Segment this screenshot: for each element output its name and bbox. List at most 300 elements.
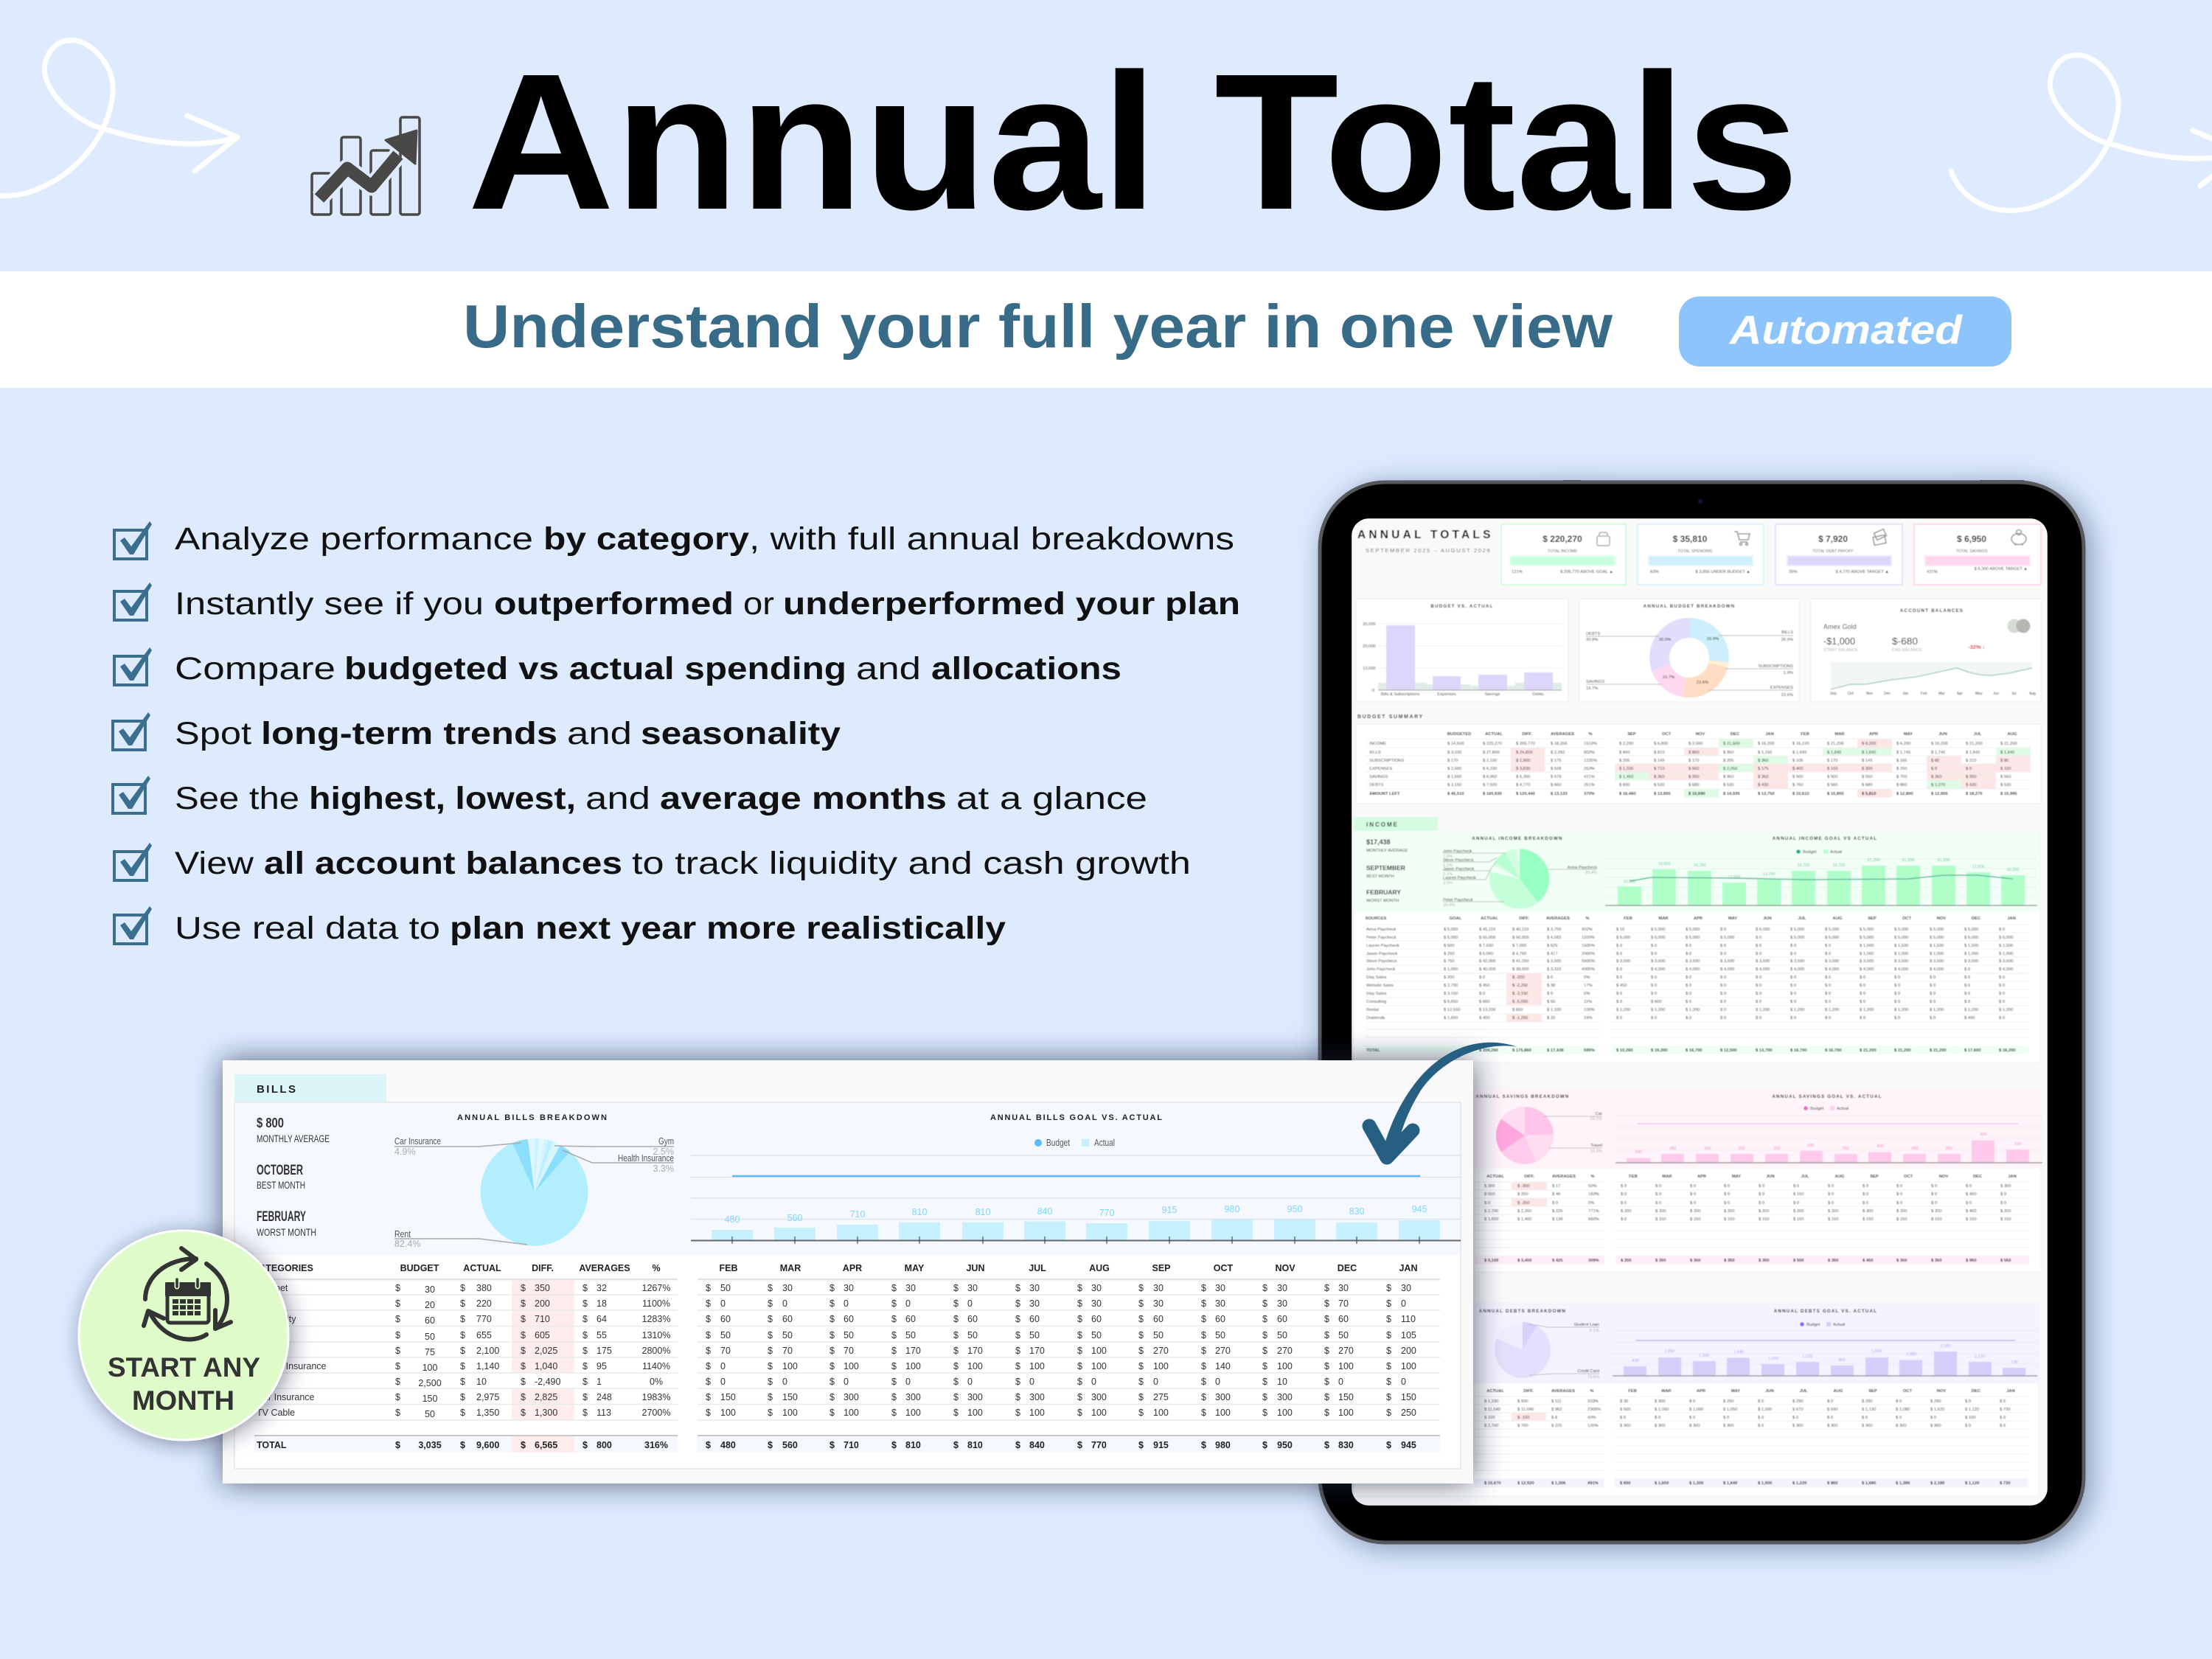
income table: MAY bbox=[1728, 917, 1737, 921]
table rows: 1 bbox=[597, 1377, 602, 1387]
debts table: $ 11,040 bbox=[1517, 1408, 1534, 1412]
savings goal vs actual bar chart: 350 bbox=[1738, 1147, 1745, 1151]
debts goal vs actual bar chart: 1,300 bbox=[1699, 1354, 1709, 1358]
budget summary table: $ 1,800 bbox=[1516, 759, 1530, 763]
income table: $ 13,200 bbox=[1479, 1008, 1496, 1012]
income table: $ 21,200 bbox=[1930, 1048, 1947, 1053]
savings table: $ 2,700 bbox=[1484, 1209, 1498, 1214]
table rows: 100 bbox=[1401, 1361, 1416, 1371]
income table: $ 3,500 bbox=[1790, 959, 1804, 964]
income table: $ 0 bbox=[1790, 1000, 1796, 1004]
budget summary table: $ 1,845 bbox=[1827, 751, 1841, 755]
debts table bbox=[1475, 1389, 2028, 1487]
income table: $ 0 bbox=[1964, 975, 1970, 980]
bullet 1: by category bbox=[543, 521, 749, 557]
chart panel: budget vs actual: Expenses bbox=[1437, 692, 1456, 697]
income table: $ 1,500 bbox=[1999, 944, 2013, 948]
table rows: 170 bbox=[1029, 1346, 1045, 1356]
income pie chart: Jason Paycheck bbox=[1443, 867, 1474, 872]
income table: $ 5,000 bbox=[1720, 936, 1734, 940]
table rows: $$$$$$$$$$$$$$$$ bbox=[395, 1408, 1391, 1418]
savings goal vs actual bar chart: 350 bbox=[1669, 1147, 1677, 1151]
table rows: 30 bbox=[905, 1283, 916, 1293]
budget summary table: $ 2,100 bbox=[1483, 759, 1497, 763]
income table: $ 0 bbox=[1964, 1000, 1970, 1004]
debts table: $ 1,650 bbox=[1655, 1481, 1669, 1486]
badge: automated bbox=[1679, 296, 2011, 366]
table rows: 1,300 bbox=[535, 1408, 557, 1418]
table rows: 170 bbox=[967, 1346, 983, 1356]
savings table: $ 150 bbox=[1828, 1217, 1839, 1222]
income table: $ 3,500 bbox=[1930, 959, 1944, 964]
budget summary table: APR bbox=[1869, 732, 1879, 737]
income table: $ -200 bbox=[1512, 975, 1524, 980]
chart panel: budget vs actual: 20,000 bbox=[1363, 644, 1376, 649]
income table: $ 3,500 bbox=[1756, 959, 1770, 964]
bullet 4 bbox=[113, 712, 841, 751]
income table: Lauren Paycheck bbox=[1366, 944, 1399, 948]
income table: $ 40,000 bbox=[1479, 967, 1496, 972]
table rows: 30 bbox=[1029, 1283, 1040, 1293]
income table: $ 0 bbox=[1720, 992, 1726, 996]
table rows: 300 bbox=[905, 1392, 921, 1402]
income table: $ 0 bbox=[1756, 1016, 1761, 1020]
savings table: $ 0 bbox=[1863, 1192, 1868, 1197]
budget summary table: $ 860 bbox=[1896, 783, 1907, 787]
income table: $ 1,650 bbox=[1444, 1016, 1458, 1020]
KPI card: total income: $ 220,270 bbox=[1543, 534, 1582, 544]
debts goal vs actual bar chart: Budget bbox=[1806, 1323, 1820, 1327]
table rows: 300 bbox=[1215, 1392, 1231, 1402]
table rows: 140 bbox=[1215, 1361, 1231, 1371]
income table: $ 0 bbox=[1686, 975, 1691, 980]
dashboard heading: ANNUAL TOTALS bbox=[1357, 529, 1494, 541]
budget summary table: $ 12,955 bbox=[1931, 792, 1948, 796]
income table: $ 1,000 bbox=[1860, 952, 1874, 956]
savings table: $ 350 bbox=[1759, 1259, 1770, 1263]
income table: $ 4,000 bbox=[1999, 967, 2013, 972]
table rows: 30 bbox=[425, 1284, 435, 1295]
table header: MAY bbox=[905, 1263, 925, 1273]
income table: $ 0 bbox=[1999, 984, 2005, 988]
income table: $ 1,000 bbox=[1999, 952, 2013, 956]
income table: $ 4,000 bbox=[1894, 967, 1908, 972]
savings table: $ 350 bbox=[1828, 1259, 1839, 1263]
income table: $ 7,000 bbox=[1512, 944, 1526, 948]
budget summary table: $ 250 bbox=[1896, 767, 1907, 771]
budget summary table: $ 6,950 bbox=[1483, 775, 1497, 779]
bullet 7: Use real data to bbox=[175, 911, 440, 946]
KPI card: total spending: 63% bbox=[1650, 570, 1659, 574]
income table: $ 5,000 bbox=[1894, 928, 1908, 932]
income table: $ 1,200 bbox=[1930, 1008, 1944, 1012]
table rows: Car Insurance bbox=[257, 1392, 315, 1402]
table rows: 10 bbox=[476, 1377, 487, 1387]
income table: $ 0 bbox=[1720, 928, 1726, 932]
KPI card: total income: TOTAL INCOME bbox=[1548, 549, 1578, 554]
table rows: 100 bbox=[782, 1408, 798, 1418]
debts goal vs actual bar chart: 1,680 bbox=[1871, 1349, 1882, 1354]
savings table: $ 0 bbox=[1828, 1192, 1834, 1197]
savings table: $ 0 bbox=[1690, 1192, 1696, 1197]
income table: 105% bbox=[1584, 1008, 1595, 1012]
budget summary table: $ 13,855 bbox=[1654, 792, 1671, 796]
budget summary table: $ 10,610 bbox=[1792, 792, 1809, 796]
table rows: 100 bbox=[844, 1408, 859, 1418]
bullet 4: Spot bbox=[175, 716, 251, 751]
income table: $ 0 bbox=[1860, 992, 1865, 996]
income table: $ 0 bbox=[1651, 1016, 1657, 1020]
debts table: $ 1,300 bbox=[1689, 1481, 1703, 1486]
table rows: $$$$$$$$$$$$$$$$ bbox=[395, 1298, 1391, 1309]
income table: $ 3,333 bbox=[1547, 967, 1561, 972]
table rows: 0 bbox=[844, 1298, 849, 1309]
table rows: $$$$$$$$$$$$$$$$ bbox=[395, 1330, 1391, 1340]
debts table: $ 0 bbox=[1896, 1399, 1902, 1404]
income table: Etsy Sales bbox=[1366, 992, 1386, 996]
savings goal vs actual bar chart: 950 bbox=[1980, 1133, 1987, 1137]
savings table: $ 150 bbox=[1724, 1217, 1735, 1222]
savings table: $ 3,450 bbox=[1517, 1259, 1531, 1263]
KPI card: total income: 121% bbox=[1512, 570, 1523, 574]
income pie chart: 39.4% bbox=[1443, 903, 1455, 908]
savings table: $ 200 bbox=[1724, 1209, 1735, 1214]
savings table: $ 0 bbox=[1484, 1201, 1490, 1206]
budget summary table: $ 5,810 bbox=[1862, 792, 1876, 796]
budget summary table: SAVINGS bbox=[1369, 775, 1388, 779]
budget summary table: $ 680 bbox=[1862, 783, 1873, 787]
savings table: $ 0 bbox=[1759, 1184, 1764, 1189]
savings goal vs actual bar chart: 550 bbox=[2014, 1142, 2022, 1147]
icon: shopping cart bbox=[1734, 532, 1750, 546]
budget summary table: $ 550 bbox=[1862, 775, 1873, 779]
income table: $ 0 bbox=[1894, 1000, 1900, 1004]
savings table: $ 350 bbox=[1931, 1259, 1942, 1263]
debts table: $ 300 bbox=[1827, 1424, 1838, 1428]
savings table: $ 0 bbox=[1621, 1192, 1627, 1197]
budget summary table: $ 350 bbox=[1966, 775, 1977, 779]
debts table: $ 0 bbox=[1827, 1416, 1833, 1420]
debts table: $ 1,640 bbox=[1723, 1481, 1737, 1486]
savings table: 660% bbox=[1588, 1217, 1599, 1222]
income table: $ 5,000 bbox=[1930, 928, 1944, 932]
income table: $ 0 bbox=[1720, 952, 1726, 956]
KPI card: total savings: TOTAL SAVINGS bbox=[1956, 549, 1988, 554]
table rows: 100 bbox=[422, 1363, 437, 1373]
savings goal vs actual bar chart: 450 bbox=[1877, 1144, 1884, 1149]
debts table: SEP bbox=[1868, 1389, 1877, 1394]
table rows: 30 bbox=[967, 1283, 978, 1293]
bills summary stats: WORST MONTH bbox=[257, 1226, 316, 1238]
table rows: 0 bbox=[1401, 1377, 1406, 1387]
table rows: 60 bbox=[905, 1314, 916, 1324]
chart panel: account balances: May bbox=[1975, 692, 1983, 696]
table rows: 150 bbox=[720, 1392, 736, 1402]
table rows: 100 bbox=[1029, 1408, 1045, 1418]
income table: $ 250 bbox=[1444, 952, 1455, 956]
savings table: $ 400 bbox=[1966, 1192, 1977, 1197]
debts pie chart: Credit Card bbox=[1577, 1369, 1599, 1374]
income table: $ 209,260 bbox=[1479, 1048, 1498, 1053]
table rows: 200 bbox=[535, 1298, 550, 1309]
debts table: $ 730 bbox=[2000, 1408, 2011, 1412]
subtitle: Understand your full year in one view bbox=[463, 292, 1613, 361]
table rows: $$$$$$$$$$$$$$$$ bbox=[395, 1346, 1391, 1356]
savings table: $ 150 bbox=[1863, 1217, 1874, 1222]
table rows: 100 bbox=[905, 1361, 921, 1371]
income table: $ 0 bbox=[1790, 984, 1796, 988]
savings table: $ 0 bbox=[1931, 1201, 1937, 1206]
chart panel: budget vs actual: 0 bbox=[1372, 689, 1374, 693]
income table: $ 1,100 bbox=[1547, 1008, 1561, 1012]
savings table: $ 0 bbox=[1828, 1201, 1834, 1206]
table rows: Gym bbox=[257, 1346, 276, 1356]
income table: $ 3,500 bbox=[1964, 959, 1978, 964]
savings pie chart bbox=[1475, 1094, 1602, 1164]
debts goal vs actual bar chart: 1,650 bbox=[1664, 1349, 1674, 1354]
savings table: ACTUAL bbox=[1486, 1175, 1504, 1179]
table rows: 220 bbox=[476, 1298, 492, 1309]
income table: $ 5,000 bbox=[1651, 928, 1665, 932]
table rows: 50 bbox=[1091, 1330, 1102, 1340]
bullet 1: Analyze performance bbox=[175, 521, 533, 557]
budget summary table: MAY bbox=[1904, 732, 1913, 737]
bills tab bbox=[234, 1074, 386, 1102]
income table: $ 500 bbox=[1444, 944, 1455, 948]
table rows: 275 bbox=[1153, 1392, 1169, 1402]
budget summary table: AUG bbox=[2008, 732, 2017, 737]
debts table: $ 1,680 bbox=[1862, 1481, 1876, 1486]
table rows: 50 bbox=[720, 1283, 731, 1293]
table rows: 30 bbox=[1091, 1283, 1102, 1293]
income table: $ 5,000 bbox=[1999, 936, 2013, 940]
income table: $ 42,000 bbox=[1479, 959, 1496, 964]
debts table: $ 290 bbox=[1723, 1399, 1734, 1404]
income table: 0% bbox=[1584, 992, 1590, 996]
budget summary table: EXPENSES bbox=[1369, 767, 1392, 771]
savings table: $ 0 bbox=[1724, 1184, 1730, 1189]
income table: $ 6,000 bbox=[1756, 928, 1770, 932]
debts table: $ 730 bbox=[2000, 1481, 2011, 1486]
savings table: $ 250 bbox=[1517, 1192, 1528, 1197]
budget summary table: FEB bbox=[1801, 732, 1809, 737]
income table: 902% bbox=[1582, 928, 1593, 932]
income table: $ 0 bbox=[1790, 952, 1796, 956]
savings table: $ 1,400 bbox=[1517, 1217, 1531, 1222]
KPI card: total spending bbox=[1638, 524, 1764, 585]
table rows: 50 bbox=[425, 1332, 435, 1342]
table rows: 60 bbox=[1277, 1314, 1287, 1324]
income table: $ 1,500 bbox=[1964, 944, 1978, 948]
savings table: MAY bbox=[1732, 1175, 1741, 1179]
income table: $ 5,650 bbox=[1444, 1000, 1458, 1004]
income pie chart: John Paycheck bbox=[1443, 849, 1472, 854]
income table: $ 2,700 bbox=[1444, 984, 1458, 988]
bullet 6: View bbox=[175, 846, 254, 881]
debts table: $ 0 bbox=[2000, 1399, 2006, 1404]
debts pie chart: Student Loan bbox=[1573, 1323, 1599, 1327]
income table: ACTUAL bbox=[1481, 917, 1498, 921]
bills summary stats: MONTHLY AVERAGE bbox=[257, 1133, 330, 1144]
bills summary stats: OCTOBER bbox=[257, 1163, 303, 1178]
income table: $ 5,000 bbox=[1686, 936, 1700, 940]
income goal vs actual bar chart: 16,700 bbox=[1798, 863, 1809, 868]
income table: $ 21,200 bbox=[1894, 1048, 1911, 1053]
chart panel: annual budget breakdown: ANNUAL BUDGET BREAKDOWN bbox=[1644, 604, 1735, 609]
income goal vs actual bar chart: 12,500 bbox=[1728, 875, 1740, 880]
table rows: 20 bbox=[425, 1300, 435, 1310]
debts pie chart: 73.6% bbox=[1587, 1375, 1599, 1380]
table rows: 60 bbox=[1091, 1314, 1102, 1324]
income table: $ 4,000 bbox=[1651, 967, 1665, 972]
budget summary table: % bbox=[1588, 732, 1593, 737]
income table: $ 0 bbox=[1930, 975, 1935, 980]
icon: wallet bbox=[1597, 532, 1610, 546]
budget summary table: $ 165 bbox=[1896, 759, 1907, 763]
tablet body bbox=[1320, 480, 2084, 1543]
bills goal vs actual bar chart: 915 bbox=[1162, 1205, 1177, 1215]
income table: $ 3,500 bbox=[1686, 959, 1700, 964]
table header: MAR bbox=[780, 1263, 801, 1273]
chart panel: annual budget breakdown: 30.9% bbox=[1586, 638, 1598, 642]
savings table: $ 200 bbox=[1759, 1209, 1770, 1214]
table rows: 248 bbox=[597, 1392, 612, 1402]
savings table: $ 138 bbox=[1552, 1217, 1563, 1222]
budget summary table: $ 21,200 bbox=[2000, 742, 2017, 746]
budget summary table: $ 1,745 bbox=[1931, 751, 1945, 755]
budget summary table: $ 3,150 bbox=[1447, 783, 1461, 787]
income table: $ 0 bbox=[1825, 952, 1831, 956]
income table: $ 4,000 bbox=[1686, 967, 1700, 972]
budget summary table: $ 16,200 bbox=[1931, 742, 1948, 746]
budget summary table: $ 21,600 bbox=[1723, 742, 1740, 746]
savings table bbox=[1475, 1175, 2029, 1265]
budget summary table: $ 1,650 bbox=[1447, 775, 1461, 779]
table rows: 915 bbox=[1153, 1440, 1169, 1450]
savings table: $ 200 bbox=[1896, 1209, 1907, 1214]
budget summary table: $ 350 bbox=[1654, 775, 1665, 779]
budget summary table: 1519% bbox=[1584, 742, 1597, 746]
savings section bbox=[1354, 1088, 2042, 1272]
table header: % bbox=[652, 1263, 661, 1273]
budget summary table: $ 530 bbox=[2000, 783, 2011, 787]
budget summary table: $ 80 bbox=[2000, 759, 2008, 763]
savings table: $ 150 bbox=[1655, 1217, 1666, 1222]
debts table: $ 0 bbox=[2000, 1416, 2006, 1420]
table header: NOV bbox=[1275, 1263, 1295, 1273]
table rows: 0 bbox=[720, 1377, 726, 1387]
table rows: 0 bbox=[1029, 1377, 1034, 1387]
savings table: $ 0 bbox=[1931, 1192, 1937, 1197]
income table: DIFF. bbox=[1519, 917, 1529, 921]
table rows: 150 bbox=[1338, 1392, 1354, 1402]
income pie chart: 2.1% bbox=[1443, 872, 1453, 877]
savings table: $ 225 bbox=[1552, 1209, 1563, 1214]
table rows: 30 bbox=[1215, 1298, 1225, 1309]
budget summary table: $ 550 bbox=[2000, 775, 2011, 779]
budget summary table: $ 760 bbox=[1792, 783, 1804, 787]
bullet 5: See the bbox=[175, 781, 299, 816]
bills goal vs actual bar chart: 950 bbox=[1287, 1204, 1302, 1214]
table header: JUL bbox=[1029, 1263, 1046, 1273]
chart legend: Actual bbox=[1094, 1138, 1115, 1148]
chart panel: budget vs actual: 30,000 bbox=[1363, 622, 1376, 627]
budget summary table: JUN bbox=[1938, 732, 1947, 737]
table rows: 100 bbox=[1153, 1361, 1169, 1371]
savings table: $ 200 bbox=[1655, 1209, 1666, 1214]
budget summary table: $ 500 bbox=[1827, 775, 1838, 779]
income table: $ 0 bbox=[1756, 944, 1761, 948]
debts table: MAR bbox=[1661, 1389, 1672, 1394]
table rows: 170 bbox=[905, 1346, 921, 1356]
table header: DIFF. bbox=[532, 1263, 554, 1273]
savings table: 50% bbox=[1588, 1184, 1597, 1189]
income table: $ 0 bbox=[1999, 1016, 2005, 1020]
chart panel: account balances: Jun bbox=[1993, 692, 1999, 696]
KPI card: total savings: $ 5,300 ABOVE TARGET ▲ bbox=[1975, 567, 2028, 571]
table rows: 70 bbox=[782, 1346, 793, 1356]
chart panel: account balances: START BALANCE bbox=[1823, 648, 1858, 653]
table rows: 605 bbox=[535, 1330, 550, 1340]
table rows: 100 bbox=[967, 1361, 983, 1371]
table rows: 2,100 bbox=[476, 1346, 499, 1356]
income table: $ 0 bbox=[1964, 992, 1970, 996]
savings table: $ -300 bbox=[1517, 1184, 1529, 1189]
budget summary table: $ 100 bbox=[2000, 767, 2011, 771]
savings table: $ 550 bbox=[1484, 1192, 1495, 1197]
budget summary table: $ 1,845 bbox=[1966, 751, 1980, 755]
table rows: -2,490 bbox=[535, 1377, 560, 1387]
income table: $ 3,500 bbox=[1616, 959, 1630, 964]
bills panel background bbox=[223, 1060, 1473, 1484]
table rows: 1140% bbox=[642, 1361, 670, 1371]
income table: $ 0 bbox=[1720, 944, 1726, 948]
income table: 24% bbox=[1584, 1016, 1593, 1020]
savings table: $ 300 bbox=[2000, 1184, 2011, 1189]
table rows: 0 bbox=[844, 1377, 849, 1387]
table rows: 840 bbox=[1029, 1440, 1045, 1450]
income table: 11% bbox=[1584, 1000, 1592, 1004]
debts pie chart bbox=[1479, 1309, 1599, 1380]
savings goal vs actual bar chart: 350 bbox=[1704, 1147, 1711, 1151]
table rows: 60 bbox=[1338, 1314, 1349, 1324]
income table: $ 0 bbox=[1686, 984, 1691, 988]
savings table: OCT bbox=[1904, 1175, 1913, 1179]
savings table: FEB bbox=[1629, 1175, 1638, 1179]
white subtitle band bbox=[0, 271, 2212, 388]
budget summary table: $ 5,300 bbox=[1516, 775, 1530, 779]
income table: $ -1,250 bbox=[1512, 1016, 1528, 1020]
budget summary table: $ 14,500 bbox=[1447, 742, 1464, 746]
debts table: $ 111 bbox=[1551, 1399, 1562, 1404]
income table: $ -5,050 bbox=[1512, 1000, 1528, 1004]
budget summary table: $ 21,200 bbox=[1966, 742, 1983, 746]
table rows: 113 bbox=[597, 1408, 611, 1418]
income pie chart: 39.4% bbox=[1585, 871, 1597, 875]
income table: $ 5,000 bbox=[1790, 936, 1804, 940]
table rows: 2700% bbox=[642, 1408, 670, 1418]
budget summary table: NOV bbox=[1696, 732, 1705, 737]
income table: $ 0 bbox=[1616, 944, 1622, 948]
income table: $ 1,500 bbox=[1930, 944, 1944, 948]
chart panel: budget vs actual: Debts bbox=[1532, 692, 1544, 697]
income table: 1500% bbox=[1582, 944, 1595, 948]
bills goal vs actual bar chart: 810 bbox=[912, 1207, 927, 1217]
savings goal vs actual bar chart bbox=[1615, 1094, 2042, 1163]
savings table: $ 450 bbox=[1863, 1259, 1874, 1263]
table rows: 30 bbox=[782, 1283, 793, 1293]
KPI card: total debt payoff: TOTAL DEBT PAYOFF bbox=[1812, 549, 1854, 554]
